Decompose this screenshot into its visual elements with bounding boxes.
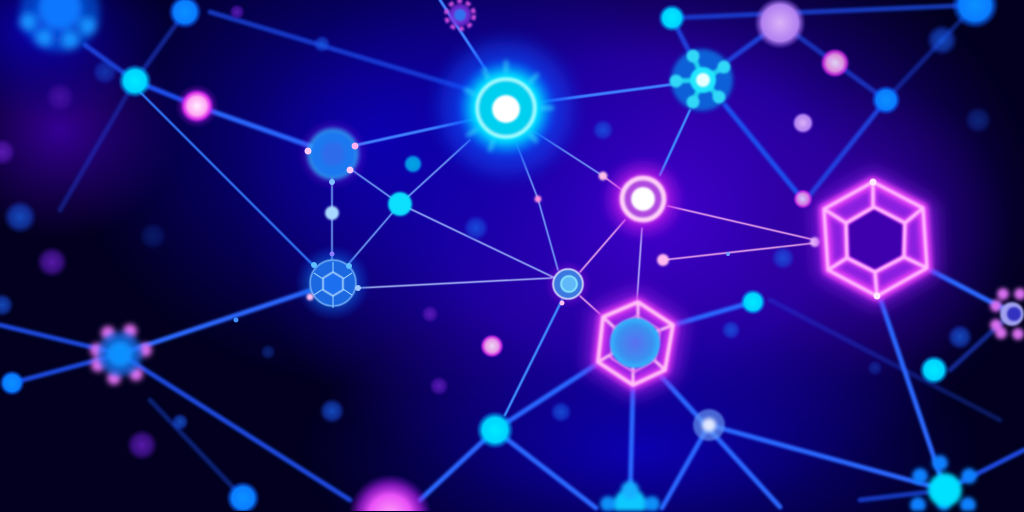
light ring node: [544, 260, 592, 308]
small glowing nodes: upper left: [118, 0, 219, 128]
bottom-right cyan flower node: [910, 455, 977, 511]
small nodes: centre and lower right: [0, 289, 949, 511]
top purple flower node: [446, 1, 474, 29]
top-right teal hub node: [670, 49, 733, 111]
bottom cyan flower node: [600, 481, 660, 511]
bottom magenta node: [348, 474, 432, 511]
central magenta hexagon with ball: [586, 290, 685, 397]
small junction nodes: [234, 172, 820, 322]
big magenta hexagon: [813, 170, 938, 308]
left magenta flower node: [90, 324, 152, 385]
blue ball node: [297, 118, 369, 190]
small nodes: top right: [658, 0, 999, 209]
blue hexagon node: [295, 245, 371, 321]
node: top-left blue flower: [19, 0, 100, 52]
magenta ring node: [599, 155, 687, 243]
central cyan hub node: [440, 42, 572, 174]
thin bright edges: [140, 0, 815, 415]
right magenta flower node: [990, 288, 1024, 340]
